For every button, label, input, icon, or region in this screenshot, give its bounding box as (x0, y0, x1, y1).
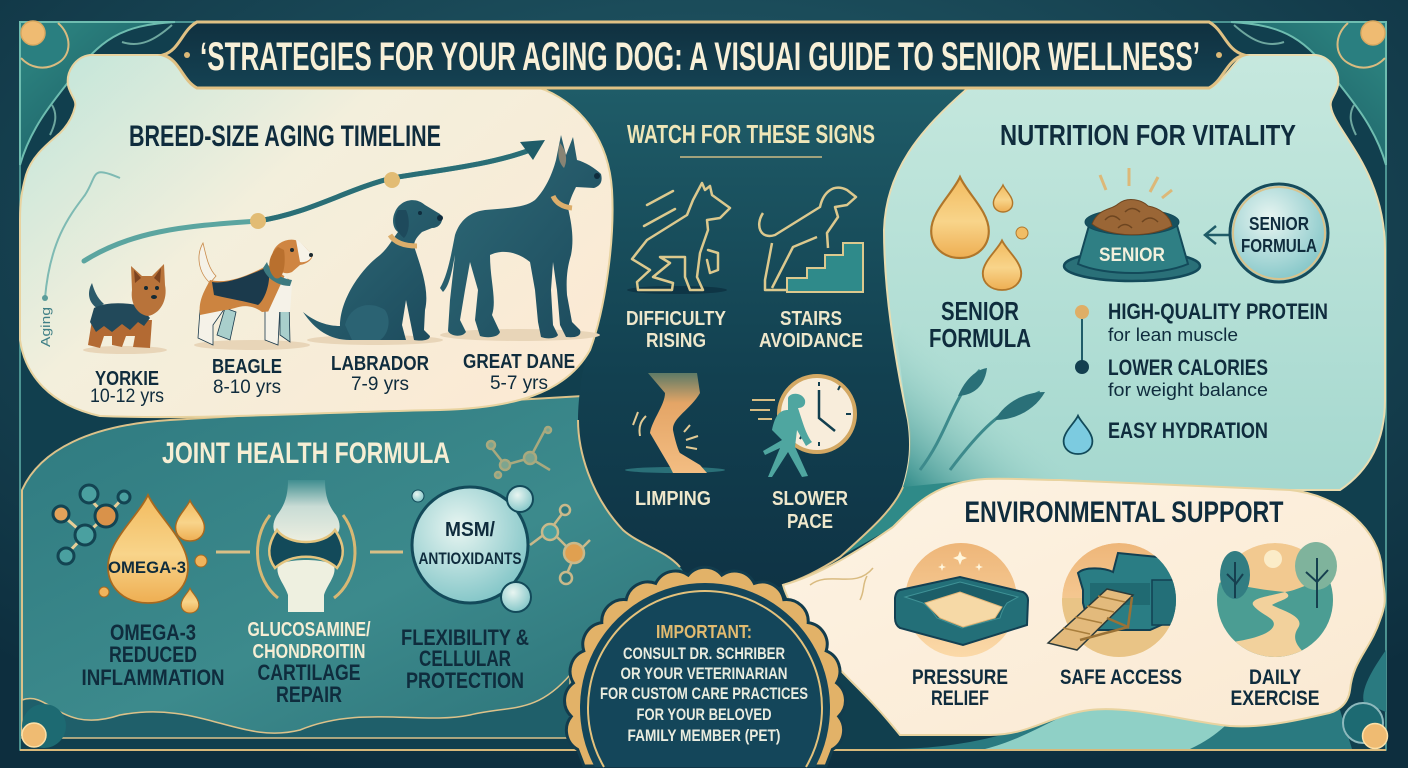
dog: great dane (440, 135, 602, 341)
dog: yorkie (83, 264, 167, 354)
corner decoration: top right (1231, 22, 1386, 165)
scalloped seal (565, 567, 845, 766)
arrow to bowl (1205, 226, 1232, 244)
label: stairs avoidance: AVOIDANCE (759, 330, 863, 352)
label: senior formula: SENIOR (941, 296, 1019, 326)
text: calories: for weight balance (1108, 380, 1268, 400)
seal centre (580, 583, 830, 767)
label: senior formula: FORMULA (929, 323, 1031, 353)
badge: important notice: OR YOUR VETERINARIAN (620, 664, 788, 683)
label: difficulty rising (626, 308, 727, 352)
label: flexibility: PROTECTION (406, 668, 524, 693)
label: great dane: 5-7 yrs (490, 373, 548, 394)
heading: joint health: JOINT HEALTH FORMULA (162, 437, 450, 470)
badge: important notice: FOR YOUR BELOVED (636, 705, 772, 724)
panel: breed-size aging timeline (20, 55, 613, 417)
label: slower pace: PACE (787, 511, 833, 533)
heading: nutrition: NUTRITION FOR VITALITY (1000, 120, 1296, 152)
label: safe access: SAFE ACCESS (1060, 666, 1182, 689)
panel: watch for these signs (500, 88, 1000, 620)
label: great dane (463, 351, 575, 394)
aging axis: Aging (38, 307, 53, 347)
label: glucosamine (248, 619, 371, 707)
text: protein (1108, 299, 1328, 345)
badge: important notice: FAMILY MEMBER (PET) (628, 726, 780, 745)
icon: water drop (1064, 416, 1092, 454)
icon: limping leg (625, 373, 725, 473)
badge: important notice: IMPORTANT: (656, 622, 752, 642)
dog: labrador (303, 200, 443, 345)
icon: molecule left (53, 485, 130, 564)
heading: timeline: BREED-SIZE AGING TIMELINE (129, 120, 441, 153)
bottom waves (22, 675, 570, 738)
dog: beagle (194, 240, 313, 350)
label: flexibility (401, 625, 529, 693)
seal ring (588, 591, 822, 767)
panel: nutrition for vitality (783, 55, 1385, 585)
icon: knee joint (258, 480, 355, 612)
label: beagle: BEAGLE (212, 356, 282, 378)
corner ornament: bottom right (1343, 650, 1388, 748)
badge: important notice: FOR CUSTOM CARE PRACTICES (600, 684, 808, 703)
label: slower pace (772, 488, 848, 533)
heading: environmental: ENVIRONMENTAL SUPPORT (964, 496, 1284, 529)
corner decoration: top left (20, 22, 175, 165)
label: beagle: 8-10 yrs (213, 377, 281, 398)
corner ornament: bottom left (22, 704, 66, 748)
icon: MSM bubble: ANTIOXIDANTS (418, 549, 522, 568)
icon: chair and ramp (1048, 543, 1180, 657)
label: yorkie: YORKIE (95, 368, 159, 390)
text: calories (1108, 355, 1268, 400)
label: yorkie: 10-12 yrs (90, 386, 164, 407)
label: glucosamine: CHONDROITIN (252, 641, 366, 663)
panel: environmental support (783, 479, 1388, 749)
callout: senior formula bubble: FORMULA (1241, 236, 1317, 256)
badge: important notice (565, 567, 845, 767)
callout: senior formula bubble: SENIOR (1249, 214, 1309, 234)
label: omega-3: OMEGA-3 (110, 620, 196, 645)
text: calories: LOWER CALORIES (1108, 355, 1268, 380)
text: protein: HIGH-QUALITY PROTEIN (1108, 299, 1328, 324)
icon: oil drops (931, 177, 1028, 290)
icon: omega-3 drop (99, 495, 207, 613)
label: pressure relief: RELIEF (931, 687, 989, 710)
badge: important notice: CONSULT DR. SCHRIBER (623, 644, 785, 663)
callout: senior formula bubble (1230, 184, 1328, 282)
aging axis (38, 172, 120, 347)
icon: slower pace clock (750, 376, 855, 477)
label: pressure relief (912, 666, 1008, 710)
label: limping: LIMPING (635, 488, 711, 510)
label: pressure relief: PRESSURE (912, 666, 1008, 689)
label: slower pace: SLOWER (772, 488, 848, 510)
icon: MSM bubble: MSM/ (445, 519, 495, 541)
label: glucosamine: CARTILAGE (258, 660, 360, 685)
label: labrador (331, 353, 429, 395)
icon: molecule top (487, 427, 551, 478)
label: difficulty rising: RISING (646, 330, 706, 352)
label: glucosamine: REPAIR (276, 682, 342, 707)
label: flexibility: CELLULAR (419, 646, 511, 671)
icon: difficulty rising (627, 183, 730, 294)
decorative squiggles (810, 568, 873, 600)
icon: senior food bowl: SENIOR (1099, 245, 1165, 266)
label: daily exercise: EXERCISE (1230, 687, 1320, 710)
label: stairs avoidance: STAIRS (780, 308, 842, 330)
label: great dane: GREAT DANE (463, 351, 575, 373)
panel: joint health formula (22, 395, 720, 748)
icon: leaves (920, 368, 1045, 470)
icon: MSM bubble (412, 486, 533, 612)
label: senior formula (929, 296, 1031, 353)
icon: path landscape (1217, 542, 1337, 657)
label: omega-3: INFLAMMATION (82, 665, 224, 690)
label: omega-3: REDUCED (109, 642, 197, 667)
teal wedge (897, 315, 1084, 490)
connector lines (216, 550, 403, 554)
text: protein: for lean muscle (1108, 325, 1238, 345)
heading: watch: WATCH FOR THESE SIGNS (627, 119, 875, 149)
trend arrow (84, 140, 545, 261)
label: omega-3 (82, 620, 224, 690)
label: labrador: LABRADOR (331, 353, 429, 375)
icon: nutrition bullets (1075, 305, 1089, 374)
icon: senior food bowl (1064, 168, 1200, 281)
label: difficulty rising: DIFFICULTY (626, 308, 727, 330)
label: yorkie (90, 368, 164, 407)
icon: bed (895, 543, 1028, 657)
label: stairs avoidance (759, 308, 863, 352)
icon: molecule right (530, 505, 590, 584)
label: daily exercise: DAILY (1249, 666, 1301, 689)
corner ornaments: top (21, 21, 1385, 68)
label: flexibility: FLEXIBILITY & (401, 625, 529, 650)
label: labrador: 7-9 yrs (351, 374, 409, 395)
title banner (163, 22, 1244, 88)
label: beagle (212, 356, 282, 398)
icon: omega-3 drop: OMEGA-3 (108, 558, 186, 577)
text: hydration: EASY HYDRATION (1108, 418, 1268, 443)
label: glucosamine: GLUCOSAMINE/ (248, 619, 371, 641)
icon: stairs avoidance (759, 188, 863, 292)
label: daily exercise (1230, 666, 1320, 710)
